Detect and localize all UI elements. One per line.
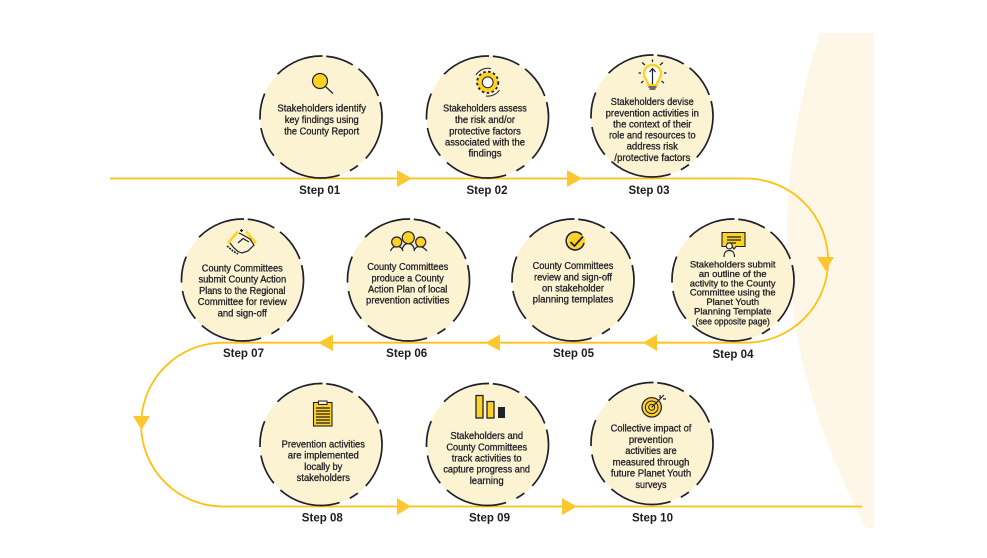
text: step 10 description (611, 424, 692, 491)
text: step 08 description: locally by (304, 462, 342, 473)
text: step 04 description: Planet Youth (706, 297, 759, 308)
text: step 03 description: the context of their (613, 119, 692, 130)
text: step 05 description: planning templates (533, 295, 613, 306)
text: step 05 description (533, 261, 613, 306)
text: step 03 description: role and resources to (609, 131, 696, 142)
text: step 02 description: Stakeholders assess (443, 104, 527, 115)
text: step 05 description: review and sign-off (534, 272, 612, 283)
label: step 10: Step 10 (632, 513, 673, 525)
text: step 08 description: are implemented (288, 451, 359, 462)
text: step 03 description (606, 97, 699, 164)
step 10 (566, 357, 738, 530)
text: step 09 description: capture progress and (443, 465, 530, 476)
text: step 07 description: County Committees (202, 263, 283, 274)
text: step 09 description: County Committees (446, 442, 527, 453)
text: step 10 description: activities are (625, 446, 677, 457)
text: step 05 description: County Committees (533, 261, 613, 272)
step 01 (235, 31, 407, 203)
icon: magnifying glass (312, 74, 333, 94)
icon: three people (390, 232, 427, 251)
text: step 07 description: Committee for review (198, 297, 288, 308)
step 07 (156, 194, 329, 366)
text: step 10 description: measured through (613, 457, 689, 468)
text: step 03 description: /protective factors (614, 153, 690, 164)
label: step 04: Step 04 (712, 349, 754, 361)
step 08 (235, 358, 407, 531)
text: step 04 description: Committee using the (690, 288, 776, 299)
text: step 09 description: Stakeholders and (450, 431, 523, 442)
label: step 02: Step 02 (466, 185, 508, 197)
text: step 01 description: key findings using (285, 115, 359, 126)
text: step 10 description: surveys (636, 480, 666, 491)
text: step 04 description: activity to the County (690, 278, 776, 289)
text: step 06 description: County Committees (367, 262, 448, 273)
text: step 02 description (443, 104, 527, 160)
background cream curve (787, 33, 874, 528)
label: step 01: Step 01 (299, 185, 341, 197)
text: step 09 description: learning (470, 476, 504, 487)
icon: person with speech bubble (722, 232, 745, 257)
text: step 10 description: prevention (629, 435, 673, 446)
icon: check mark (566, 232, 585, 250)
text: step 08 description: stakeholders (297, 473, 350, 484)
text: step 04 description (690, 259, 776, 326)
text: step 06 description: produce a County (372, 273, 444, 284)
text: step 07 description (198, 263, 288, 319)
text: step 06 description (366, 262, 449, 307)
icon: handshake (227, 229, 256, 254)
icon: gear (476, 68, 500, 96)
icon: bar chart (476, 396, 505, 418)
step 03 (566, 30, 738, 202)
label: step 05: Step 05 (553, 348, 595, 360)
flow arrows (133, 170, 834, 515)
text: step 07 description: Plans to the Regional (199, 286, 285, 297)
text: step 03 description: Stakeholders devise (611, 97, 694, 108)
icon: light bulb (638, 60, 666, 89)
text: step 01 description (277, 104, 366, 137)
text: step 08 description: Prevention activities (282, 439, 365, 450)
label: step 09: Step 09 (469, 513, 510, 525)
text: step 02 description: protective factors (449, 126, 521, 137)
text: step 10 description: future Planet Youth (611, 469, 691, 480)
label: step 07: Step 07 (223, 348, 264, 360)
label: step 03: Step 03 (628, 185, 670, 197)
text: step 09 description: track activities to (452, 454, 522, 465)
step 02 (401, 31, 574, 203)
text: step 02 description: the risk and/or (455, 115, 516, 126)
text: step 04 description: an outline of the (699, 269, 767, 280)
text: step 02 description: associated with the (445, 137, 525, 148)
step 05 (487, 194, 659, 366)
step 09 (401, 358, 574, 531)
text: step 01 description: the County Report (284, 126, 359, 137)
text: step 03 description: prevention activities in (606, 108, 699, 119)
icon: clipboard (314, 401, 332, 426)
text: step 09 description (443, 431, 530, 487)
text: step 03 description: address risk (627, 142, 679, 153)
text: step 01 description: Stakeholders identify (277, 104, 366, 115)
text: step 07 description: and sign-off (218, 308, 267, 319)
text: step 08 description (282, 439, 365, 484)
step 06 (322, 194, 495, 366)
flow line (110, 178, 862, 506)
text: step 07 description: submit County Action (198, 275, 286, 286)
text: step 10 description: Collective impact of (611, 424, 692, 435)
text: step 02 description: findings (468, 149, 502, 160)
label: step 06: Step 06 (386, 348, 427, 360)
text: step 04 description: (see opposite page) (696, 316, 770, 326)
text: step 04 description: Stakeholders submit (690, 259, 776, 270)
text: step 06 description: Action Plan of local (368, 285, 447, 296)
text: step 06 description: prevention activities (366, 296, 449, 307)
icon: target with arrow (642, 395, 666, 417)
step 04 (647, 194, 819, 366)
label: step 08: Step 08 (302, 513, 343, 525)
text: step 05 description: on stakeholder (542, 284, 605, 295)
text: step 04 description: Planning Template (694, 306, 771, 317)
